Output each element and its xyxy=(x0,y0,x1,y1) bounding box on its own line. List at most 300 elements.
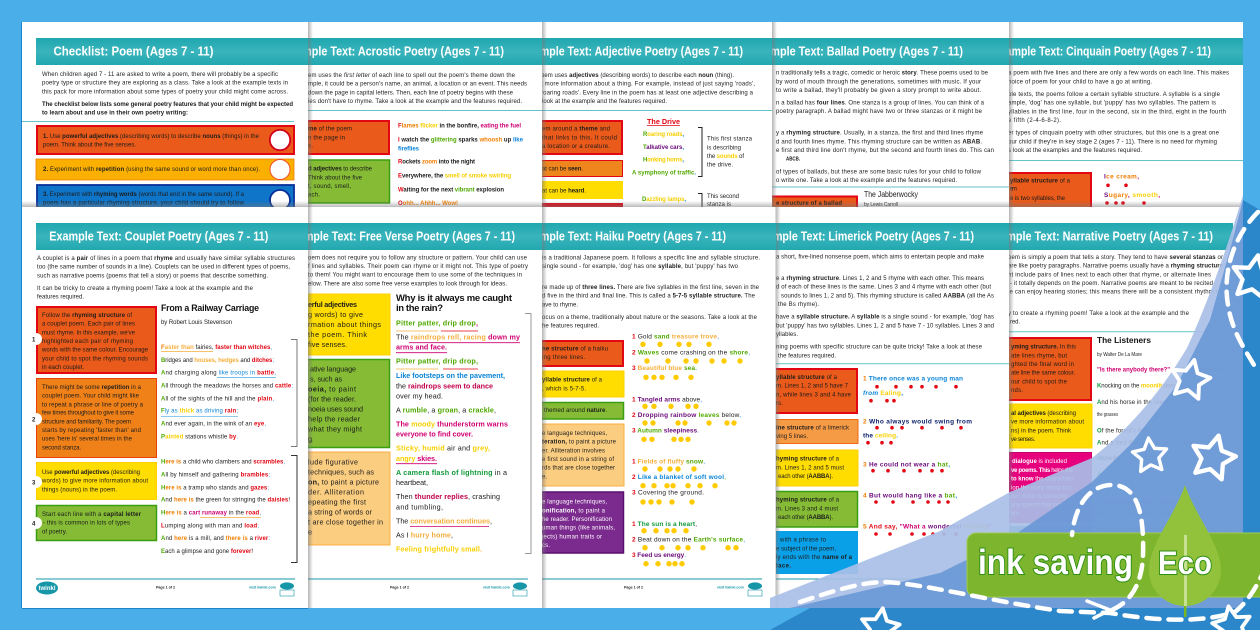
poem: free verse: A rumble, a groan, a crackle, xyxy=(396,405,496,414)
arrow head on stitched line xyxy=(1087,601,1110,618)
intro text: narrative: le can enjoy hearing stories; this means there will be a consistent rhythm to xyxy=(1008,290,1222,296)
feature box: nature xyxy=(535,402,624,419)
poem: The Listeners: And a bird flew up out of the turret, xyxy=(1097,440,1197,446)
poem: stanza 1: Bridges and houses, hedges and ditches; xyxy=(161,358,274,364)
feature box: powerful adjectives: erful adjectives xyxy=(308,300,357,309)
poem: stanza 1: All of the sights of the hill and the plain, xyxy=(161,396,274,402)
poems: haiku: 2 Beat down on the Earth's surface, xyxy=(632,537,745,544)
poem: free verse: over my head. xyxy=(396,391,443,400)
page: cinquain poetry xyxy=(993,22,1243,212)
intro text: ballad: ABCB. xyxy=(786,156,801,162)
poem: stanza 2: Each a glimpse and gone forever! xyxy=(161,549,253,555)
intro text: cinquain: our child if they're in key stage 2 (ages 7 - 11). There is no need for rhyming xyxy=(1008,139,1217,145)
poem: The Drive: Roaring roads, xyxy=(643,132,684,138)
poem: The Drive: A symphony of traffic. xyxy=(632,171,696,177)
feature box: powerful adjectives: rmation about things xyxy=(308,320,381,329)
feature box: line structure: ing three lines. xyxy=(542,355,585,361)
feature box: rhyming structure: our child to spot the xyxy=(1011,379,1068,385)
feature box: figurative techniques: a string of words or xyxy=(308,507,373,516)
intro text: acrostic: mple, it could be a person's name, an animal, a location or an event. This needs xyxy=(308,82,527,88)
poems: haiku: 3 Feed us energy. xyxy=(632,552,686,559)
intro text: adjective: roaring roads'. Every line in the poem has at least one adjective describing a xyxy=(541,90,754,96)
feature box: rhyming structure: ate lines rhyme, but xyxy=(1011,353,1067,359)
intro text: acrostic xyxy=(308,73,527,105)
poem: The Listeners: "Is there anybody there?" said the Traveller, xyxy=(1097,368,1222,374)
feature box: nature: themed around nature. xyxy=(544,408,607,414)
intro text: cinquain: s look at the examples and the features required. xyxy=(1008,148,1142,154)
intro text: couplet: A couplet is a pair of lines in a poem that rhyme and usually have similar syllable structures xyxy=(37,256,295,262)
poem: The Listeners: And he smote upon the door again xyxy=(1097,472,1200,478)
intro text: cinquain: ple texts, the poems follow a certain syllable structure. A syllable is a single xyxy=(1008,92,1221,98)
feature box: teal xyxy=(1000,526,1092,576)
intro text: ballad: to write a ballad, they'll probably be given a story prompt to write about. xyxy=(776,88,981,94)
poem: bonfire acrostic: Rockets zoom into the night xyxy=(398,160,475,166)
intro text: ballad: d and fourth lines rhyme. This rhyming structure can be written as ABAB. xyxy=(776,139,982,145)
feature box 4: capital letter: of poetry. xyxy=(42,529,67,535)
intro text: ballad: n traditionally tells a tragic, comedic or heroic story. These poems used to be xyxy=(776,71,989,77)
poem: The Listeners: by Walter De La Mare xyxy=(1097,352,1142,358)
feature box 1: rhyming structure: words with the same colour. Encourage xyxy=(41,348,149,354)
feature box 2: repetition: uses 'here is' several times in the xyxy=(42,437,133,443)
feature box: figurative language: ative language xyxy=(310,365,356,374)
intro text: cinquain: a poem with five lines and there are only a few words on each line. This makes xyxy=(1008,71,1229,77)
feature box: dialogue: ion the story along too xyxy=(1011,485,1072,491)
poem: The Listeners: Above the Traveller's head: xyxy=(1097,456,1157,462)
feature box: rhyming lines 1 2 5: each other (AABBA). xyxy=(778,474,833,480)
poem: The Listeners: the grasses xyxy=(1097,412,1118,418)
poems: haiku: 3 Beautiful blue sea. xyxy=(632,365,697,372)
poem title: From a Railway Carriage: From a Railway Carriage xyxy=(161,303,259,313)
stitched dashed line: bottom xyxy=(800,575,1260,620)
title bar: checklist: Checklist: Poem (Ages 7 - 11) xyxy=(54,44,214,58)
feature box: figurative language: oeia, to paint xyxy=(308,385,356,394)
feature box: dialogue: any speech they include xyxy=(1011,503,1072,509)
feature box: theme xyxy=(535,121,622,154)
feature box: powerful adjectives xyxy=(300,294,390,355)
intro text: limerick: sounds to lines 1, 2 and 5). This rhyming structure is called AABBA (all the As xyxy=(781,293,994,299)
feature box 3: powerful adjectives: things (nouns) in the poem. xyxy=(42,487,117,493)
title bar: narrative xyxy=(987,223,1233,250)
footer: free verse: Page 1 of 2 xyxy=(390,586,409,590)
title bar: adjective xyxy=(521,38,772,65)
feature box: adjectives: ve more information about xyxy=(1011,420,1084,426)
checklist item 1: 1. Use powerful adjectives (describing words) to describe nouns (things) in the xyxy=(43,134,260,140)
bracket: whole poem xyxy=(525,314,531,554)
feature box: adjectives: ach. xyxy=(308,192,320,198)
poem: free verse: Pitter patter, drip drop, xyxy=(396,357,478,366)
title bar: cinquain: Example Text: Cinquain Poetry (Ages 7 - 11) xyxy=(993,44,1211,58)
feature box: personification: onification, to paint a xyxy=(542,508,606,514)
intro text: checklist: poetry type or structure they are exploring as a class. Take a look at the example texts in xyxy=(42,81,288,87)
feature box: theme name: me of the poem xyxy=(308,127,352,133)
feature box 4: capital letter: - this is common in lots of types xyxy=(43,521,130,527)
feature box: personification: cs. xyxy=(542,543,550,549)
page: ballad poetry xyxy=(751,22,1014,212)
poem: limerick: 4 But would hang like a bat, xyxy=(863,493,957,500)
intro text: couplet: such as narrative poems (poems that tell a story) or poems that describe something. xyxy=(37,273,268,279)
poem title: From a Railway Carriage: by Robert Louis Stevenson xyxy=(161,320,232,326)
poem: limerick: 3 He could not wear a hat, xyxy=(863,461,950,468)
feature box: alliteration: er. Alliteration involves xyxy=(542,448,605,454)
feature box 2: repetition: starts by repeating 'faster than' and xyxy=(42,428,141,434)
intro text: checklist: The checklist below lists some general poetry features that your child might be expected xyxy=(42,102,293,108)
poem: free verse: Pitter patter, drip drop, xyxy=(396,319,478,328)
feature box 3: powerful adjectives: 3 xyxy=(32,480,36,486)
feature box: alliteration: e. xyxy=(542,474,547,480)
poems: haiku: 1 The sun is a heart, xyxy=(632,521,697,528)
poem title: The Jabberwocky: The Jabberwocky xyxy=(864,190,918,199)
intro text: cinquain xyxy=(1008,71,1229,154)
feature box: figurative techniques: lude figurative xyxy=(308,457,358,466)
intro text: ballad: n a ballad has four lines. One stanza is a group of lines. You can think of a xyxy=(776,101,985,107)
poem title: The Jabberwocky xyxy=(864,190,918,208)
feature box: figurative techniques: t are close together in xyxy=(308,517,383,526)
poem: The Drive: the drive. xyxy=(707,162,733,168)
intro text: limerick: d of each of these lines is the same. Lines 3 and 4 rhyme with each other (but xyxy=(776,285,991,291)
footer: couplet: twinkl xyxy=(38,586,56,592)
poem: The Listeners: "Is there anybody there?" he said. xyxy=(1097,500,1177,506)
page: couplet poetry xyxy=(21,207,313,609)
feature box: syllable structure: n, while lines 3 and 4 have xyxy=(776,392,852,398)
intro text: haiku: is a traditional Japanese poem. It follows a specific line and syllable structure. xyxy=(542,255,760,261)
feature box 1: rhyming structure xyxy=(30,307,156,373)
footer: haiku: visit twinkl.com xyxy=(717,586,744,590)
poem: free verse: The raindrops roll, racing down my xyxy=(396,333,520,342)
intro text: haiku: d five in the third and final line. This is called a 5-7-5 syllable structure. The xyxy=(542,294,756,300)
title bar: haiku: Example Text: Haiku Poetry (Ages 7 - 11) xyxy=(521,228,726,244)
poem: free verse: arms and face. xyxy=(396,343,447,352)
intro text: narrative: oem is simply a poem that tells a story. They tend to have several stanzas or xyxy=(1008,255,1223,261)
feature box: alliteration: e language techniques, xyxy=(542,431,607,437)
feature box: syllable structure xyxy=(770,369,857,413)
feature box: heard xyxy=(535,181,623,199)
feature box 1: rhyming structure: 1 xyxy=(32,338,36,344)
feature box: alliteration: teration, to paint a picture xyxy=(542,440,617,446)
badge: ink saving eco: ink saving xyxy=(978,543,1133,582)
intro text: checklist: this pack for more information about some types of poetry your child might come across. xyxy=(42,90,288,96)
feature box: alliteration: e first sound in a string of xyxy=(542,457,614,463)
poem: The Drive: Honking horns, xyxy=(643,158,684,164)
feature box: rhyming structure: nds. xyxy=(1011,388,1023,394)
poem: free verse: and tumbling, xyxy=(396,502,443,511)
poems: haiku: 1 Fields of fluffy snow, xyxy=(632,459,705,466)
intro text: acrostic: ies don't have to rhyme. Take a look at the example and the features required. xyxy=(308,99,522,105)
poems: haiku: 3 Covering the ground. xyxy=(632,490,704,497)
feature box 1: rhyming structure: your child to spot the rhyming sounds xyxy=(42,356,148,362)
feature box 2: repetition: couplet poem. Your child might like xyxy=(42,394,140,400)
footer: couplet: visit twinkl.com xyxy=(249,586,276,590)
intro text: haiku: ave to rhyme. xyxy=(542,302,578,308)
feature box: personification xyxy=(535,492,624,553)
poem: stanza 1: Painted stations whistle by. xyxy=(161,434,238,440)
poem: stanza 2: Lumping along with man and load; xyxy=(161,523,259,529)
intro text: adjective: oem uses adjectives (describing words) to describe each noun (thing). xyxy=(541,73,734,79)
feature box 2: repetition: structure and familiarity. The poem xyxy=(42,419,131,425)
poem: free verse: heartbeat, xyxy=(396,478,428,487)
feature box: adjectives: al adjectives (describing xyxy=(1011,411,1076,417)
feature box: line structure: ving 5 lines. xyxy=(776,434,808,440)
poem: The Listeners: But no one descended to the xyxy=(1097,512,1171,518)
stars xyxy=(859,252,1260,630)
poem: bonfire acrostic: Flames flicker in the bonfire, eating the fuel xyxy=(398,124,521,130)
poem: stanza 1: And charging along like troops in battle, xyxy=(161,371,276,377)
intro text: limerick: the features required. xyxy=(778,353,836,359)
feature box: phrase: with a phrase to xyxy=(779,538,827,544)
page: haiku poetry xyxy=(521,207,780,608)
poem: cinquain: Ice cream, xyxy=(1104,174,1139,181)
feature box: seen: at can be seen. xyxy=(542,167,583,173)
intro text: ballad: e first and third line don't rhyme, but the second and fourth lines do. This can xyxy=(776,148,994,154)
poem: stanza 2 xyxy=(161,456,297,562)
checklist item 1: poem. Think about the five senses. xyxy=(43,142,136,148)
title bar: cinquain xyxy=(993,38,1243,65)
feature box: line structure: ne structure of a haiku xyxy=(542,346,608,352)
page: limerick poetry xyxy=(754,207,1014,608)
feature box 2: repetition: second stanza. xyxy=(42,445,81,451)
checklist item 1 xyxy=(37,126,294,154)
feature box: rhyming lines 3 4: each other (AABBA). xyxy=(778,515,833,521)
poem: limerick: 1 There once was a young man xyxy=(863,376,963,383)
title bar: free verse: Example Text: Free Verse Poetry (Ages 7 - 11) xyxy=(285,228,515,244)
page: acrostic poetry xyxy=(283,22,547,212)
feature box: syllable structure: m. Lines 1, 2 and 5 have 7 xyxy=(776,384,849,390)
feature box: alliteration: rds that are close together xyxy=(542,466,615,472)
feature box 1: rhyming structure: highlighted each pair of rhyming xyxy=(42,339,133,345)
feature box: figurative techniques: on, to paint a picture xyxy=(308,477,379,486)
poems: haiku: 1 Gold sand treasure trove, xyxy=(632,334,719,341)
feature box: rhyming lines 1 2 5 xyxy=(770,450,858,486)
intro text: limerick: a short, five-lined nonsense poem, which aims to entertain people and make xyxy=(776,255,985,261)
intro text: free verse: oem does not require you to follow any structure or pattern. Your child can use xyxy=(308,255,528,261)
poem: bonfire acrostic: Oohh... Ahhh... Wow! xyxy=(398,201,458,207)
checklist item 3: 3. Experiment with rhyming words (words that end in the same sound). If a xyxy=(43,192,245,198)
footer: couplet xyxy=(36,582,294,596)
poem: free verse: The moody thunderstorm warns xyxy=(396,419,508,428)
feature box 1: rhyming structure: must rhyme. In this example, we've xyxy=(42,330,136,336)
feature box: adjectives: ns) in the poem. Think xyxy=(1011,428,1072,434)
poem: cinquain: Sugary, smooth, xyxy=(1104,192,1160,199)
feature box: syllable structure: rs. xyxy=(776,401,783,407)
poem: bonfire acrostic xyxy=(398,124,524,207)
poem: free verse: the raindrops seem to dance xyxy=(396,381,493,390)
intro text: haiku xyxy=(542,255,760,330)
intro text: limerick: the Bs rhyme). xyxy=(778,302,819,308)
intro text: checklist: to learn about and use in their own poetry writing: xyxy=(42,111,188,117)
intro text: ballad: poetry paragraph. A ballad might have two or three stanzas or it might be xyxy=(776,109,983,115)
intro text: acrostic: down the page in capital letters. Then, each line of poetry begins with these xyxy=(308,90,514,96)
feature box: figurative language: s, such as xyxy=(310,375,342,384)
feature box: syllable structure: yllable structure of a xyxy=(542,378,603,384)
poem title: The Jabberwocky: by Lewis Carroll xyxy=(864,202,898,208)
feature box: theme: that links to this. It could xyxy=(542,135,617,141)
poem: free verse: A camera flash of lightning in a xyxy=(396,468,507,477)
poem: The Drive: is describing xyxy=(707,146,741,152)
feature box 1: rhyming structure: a couplet poem. Each pair of lines xyxy=(42,322,135,328)
title bar: acrostic: Example Text: Acrostic Poetry (Ages 7 - 11) xyxy=(283,44,504,58)
title bar: couplet xyxy=(36,223,308,250)
intro text: limerick: have a syllable structure. A syllable is a single sound - for example, 'dog' has xyxy=(776,315,994,321)
page: checklist xyxy=(21,22,313,213)
page curl: light fold xyxy=(770,195,1243,608)
poem: The Drive: Talkative cars, xyxy=(643,145,684,151)
poem: free verse: angry skies. xyxy=(396,454,437,463)
poems: haiku: 2 Waves come crashing on the shore, xyxy=(632,349,750,356)
title bar: limerick: Example Text: Limerick Poetry (Ages 7 - 11) xyxy=(754,228,974,244)
poem: free verse: Sticky, humid air and grey, xyxy=(396,444,490,453)
feature box: rhyming structure: ate line the same colour. xyxy=(1011,371,1075,377)
intro text: narrative: are like poetry paragraphs. Narrative poems usually have a rhyming structure xyxy=(1008,264,1224,270)
intro text: free verse xyxy=(308,255,528,287)
poem: The Drive: the sounds of xyxy=(707,154,744,160)
feature box: dialogue: em. xyxy=(1011,511,1020,517)
feature box: line structure: ine structure of a limerick xyxy=(776,425,850,431)
intro text: checklist xyxy=(42,72,293,117)
feature box: next xyxy=(535,203,623,213)
feature box: rhyming structure xyxy=(1000,338,1091,400)
feature box: syllable structure xyxy=(1000,173,1091,211)
page: free verse poetry xyxy=(285,207,547,608)
feature box: theme: em around a theme and xyxy=(542,127,610,133)
feature box 2: repetition: 2 xyxy=(32,418,36,424)
feature box: figurative techniques: techniques, such as xyxy=(308,467,374,476)
title bar: checklist xyxy=(36,38,308,65)
feature box: dialogue: our child is correctly xyxy=(1011,494,1067,500)
stitched dashed line: upper right xyxy=(1227,212,1258,365)
feature box: powerful adjectives: five senses. xyxy=(308,340,347,349)
feature box 1: rhyming structure: Follow the rhyming structure of xyxy=(42,313,132,319)
feature box: phrase: ly ends with the name of a xyxy=(776,555,853,561)
footer: free verse xyxy=(390,582,527,596)
checklist item 3 xyxy=(37,185,294,213)
intro text: ballad: by word of mouth through the generations, sometimes with music. If your xyxy=(776,80,981,86)
intro text: couplet: too (the same number of sounds in a line). Couplets can be used in different types of poems, xyxy=(37,265,290,271)
intro text: cinquain: hoice of poem for your child to have a go at writing. xyxy=(1008,80,1152,86)
feature box: rhyming lines 3 4 xyxy=(770,492,858,527)
intro text: limerick xyxy=(776,255,994,359)
feature box: figurative language xyxy=(300,360,390,448)
feature box: rhyming lines 3 4: m. Lines 3 and 4 must xyxy=(776,506,838,512)
poem: free verse: Feeling frightfully small. xyxy=(396,545,482,554)
intro text: narrative xyxy=(1008,255,1224,326)
poem: stanza 1: All through the meadows the horses and cattle: xyxy=(161,383,293,389)
intro text: limerick: yllables. xyxy=(776,332,798,338)
feature box: adjectives: t, sound, smell, xyxy=(308,184,351,190)
feature box: phrase: lace. xyxy=(776,564,791,570)
poem: The Drive xyxy=(632,117,753,214)
poem: stanza 2: Here is a tramp who stands and gazes; xyxy=(161,485,269,491)
poems: haiku: 1 Tangled arms above, xyxy=(632,396,702,403)
feature box: alliteration xyxy=(535,424,624,486)
feature box: dialogue: dialogue is included xyxy=(1012,459,1067,465)
intro text: ballad: o write one. Take a look at the example and the features required. xyxy=(776,178,957,184)
poem: stanza 2: Here is a cart runaway in the road, xyxy=(161,511,261,517)
feature box: figurative techniques: e. xyxy=(308,527,312,536)
deep blue background area at lower right xyxy=(770,200,1260,630)
feature box: figurative language: g. xyxy=(308,435,313,444)
intro text: narrative: ht include pairs of lines next to each other that rhyme, or alternate lines xyxy=(1008,272,1211,278)
feature box 2: repetition: There might be some repetition in a xyxy=(42,385,142,391)
footer: haiku: Page 1 of 2 xyxy=(624,586,643,590)
intro text: ballad: y a rhyming structure. Usually, in a stanza, the first and third lines rhyme xyxy=(776,131,984,137)
page: narrative poetry xyxy=(987,207,1243,608)
intro text: acrostic: em uses the first letter of each line to spell out the poem's theme down the xyxy=(308,73,516,79)
poem title: Why is it always me caught in the rain?: in the rain? xyxy=(396,303,443,314)
poem: The Listeners xyxy=(1097,335,1229,608)
feature box: syllable structure: , which is 5-7-5. xyxy=(542,386,586,392)
poem: limerick: from Ealing, xyxy=(863,390,903,397)
poem: stanza 1: And ever again, in the wink of an eye, xyxy=(161,422,266,428)
poem: free verse: Like footsteps on the pavement, xyxy=(396,371,505,380)
feature box 3: powerful adjectives: words) to give more information about xyxy=(41,479,148,485)
poem title: Why is it always me caught in the rain? xyxy=(396,293,513,314)
intro text: limerick: but 'puppy' has two syllables. Lines 1, 2 and 5 have 7 - 10 syllables. Lines 3 and xyxy=(776,323,994,329)
intro text: free verse: elow. There are also some free verse examples to look through for ideas. xyxy=(308,281,507,287)
feature box: syllable structure xyxy=(535,371,624,397)
checklist item 2: 2. Experiment with repetition (using the same sound or word more than once). xyxy=(43,167,260,173)
poem: stanza 2: All by himself and gathering brambles; xyxy=(161,473,270,479)
feature box: adjectives xyxy=(300,160,390,203)
feature box 4: capital letter: 4 xyxy=(32,522,36,528)
checklist item 2 xyxy=(36,159,294,180)
feature box 4: capital letter: Start each line with a capital letter xyxy=(42,512,142,518)
feature box: adjectives: Think about the five xyxy=(308,176,363,182)
intro text: narrative: - it totally depends on the poem. Narrative poems are meant to be recited xyxy=(1010,281,1213,287)
poem: free verse: Then thunder replies, crashing xyxy=(396,492,500,501)
poem: The Listeners: The Listeners xyxy=(1097,335,1151,345)
feature box: adjectives xyxy=(1000,404,1092,448)
feature box: rhyming lines 1 2 5: hyming structure of a xyxy=(776,457,840,463)
feature box: rhyming lines 3 4: hyming structure of a xyxy=(776,498,840,504)
poem: The Drive: This second xyxy=(707,194,739,200)
badge: ink saving eco: Eco xyxy=(1158,545,1212,581)
intro text: cinquain: er types of cinquain poetry with other structures, but this one is a great one xyxy=(1008,131,1220,137)
title bar: limerick xyxy=(754,223,1009,250)
feature box: figurative language: help the reader xyxy=(308,415,361,424)
intro text: couplet: features required. xyxy=(37,295,84,301)
poem: free verse: everyone to find cover. xyxy=(396,430,473,439)
title bar: couplet: Example Text: Couplet Poetry (Ages 7 - 11) xyxy=(49,228,268,244)
poem: limerick xyxy=(863,376,992,536)
intro text: haiku: ocus on a theme, traditionally about nature or the seasons. Take a look at the xyxy=(542,315,758,321)
feature box: adjectives: d adjectives to describe xyxy=(308,167,373,173)
poem: free verse: As I hurry home, xyxy=(396,530,453,539)
poem: The Listeners: No head from the leaf-fringed xyxy=(1097,527,1170,533)
poem: The Drive: stanza is xyxy=(707,202,731,208)
intro text: limerick: ning poems with specific structure can be quite tricky! Take a look at these xyxy=(776,345,983,351)
poem: free verse xyxy=(396,319,520,554)
feature box 3: powerful adjectives: Use powerful adjectives (describing xyxy=(42,470,140,476)
poem title: Why is it always me caught in the rain?: Why is it always me caught xyxy=(396,293,513,304)
intro text: adjective xyxy=(541,73,755,105)
feature box 2: repetition xyxy=(30,378,156,458)
poems: haiku xyxy=(632,334,750,566)
feature box: phrase xyxy=(770,531,858,574)
poem: stanza 1: Fly as thick as driving rain; xyxy=(161,409,238,415)
feature box: figurative techniques: epeating the first xyxy=(308,497,366,506)
poem: The Drive: The Drive xyxy=(647,117,680,126)
page curl: medium fold xyxy=(790,200,1243,608)
intro text: adjective: t more information about a thing. For example, instead of just saying 'roads', xyxy=(541,82,755,88)
feature box: syllable structure: yllable structure of a xyxy=(1010,179,1071,185)
title bar: free verse xyxy=(285,223,542,250)
intro text: cinquain: yllables in the first line, four in the second, six in the third, eight in the fourth xyxy=(1008,109,1226,115)
poem: limerick: 5 And say, "What a wonderful feeling!" xyxy=(863,524,992,531)
poem: bonfire acrostic: I watch the glittering sparks whoosh up like xyxy=(398,138,524,144)
feature box: dialogue: ve poems. This helps the xyxy=(1011,468,1074,474)
poem: bonfire acrostic: Waiting for the next vibrant explosion xyxy=(398,187,504,193)
checklist item 3: poem has a particular rhyming structure, your child should try to follow xyxy=(43,200,245,206)
title bar: ballad: Example Text: Ballad Poetry (Ages 7 - 11) xyxy=(751,44,963,58)
